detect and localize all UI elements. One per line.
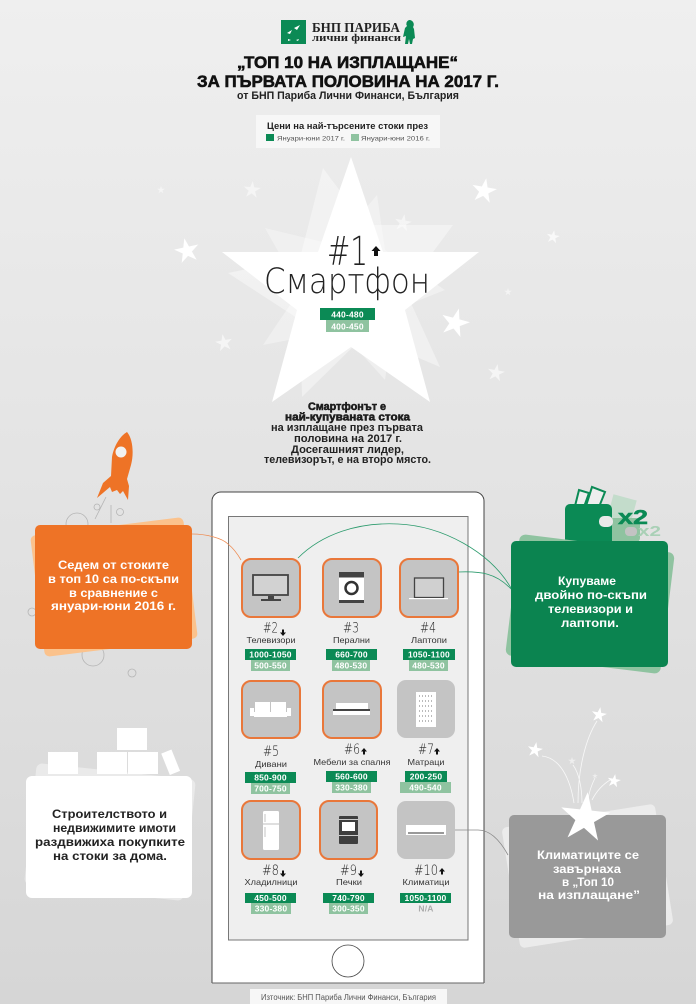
item: #3 washing machines [323,559,381,671]
item: #9 stoves: Печки [336,877,362,887]
card: green: x2 [638,523,661,540]
title: „ТОП 10 НА ИЗПЛАЩАНЕ“ [237,53,458,72]
item: #2 televisions: 1000-1050 [249,650,292,660]
source note: Източник: БНП Париба Лични Финанси, България [261,993,436,1002]
title: от БНП Париба Лични Финанси, България [237,90,459,102]
logo: лични финанси [312,33,401,44]
card: white: раздвижиха покупките [35,835,185,849]
item: #10 air conditioners [397,801,455,914]
icon: mattress [416,692,436,727]
card: grey with stars: в „Топ 10 [562,877,614,889]
item: #5 sofas: Дивани [255,759,287,769]
text block: smartphone: Досегашният лидер, [291,444,404,456]
item: #3 washing machines: 660-700 [335,650,368,660]
item: #10 air conditioners: #10 [414,863,438,879]
item: #7 mattresses: Матраци [408,757,445,767]
icon: tv [253,575,288,601]
price bars: smartphone: 400-450 [331,322,364,332]
item: #9 stoves: 740-790 [332,893,365,903]
title [197,53,499,102]
item: #2 televisions: Телевизори [246,635,296,645]
card: grey with stars [501,706,674,948]
card: grey with stars: Климатиците се [537,850,639,862]
price bars: smartphone [320,308,375,332]
item: #4 laptops: Лаптопи [411,635,447,645]
item: #2 televisions: #2 [263,620,278,636]
item: #6 bedroom furniture: 330-380 [335,782,368,792]
card: grey with stars: на изплащане” [538,890,640,902]
text block: smartphone: половина на 2017 г. [294,433,402,445]
card: green: x2 [618,507,648,529]
logo [281,20,415,44]
card: green: Купуваме [558,574,616,588]
text block: smartphone: Смартфонът е [308,401,386,413]
legend: Януари-юни 2017 г. [277,136,345,142]
card: white: Строителството и [52,807,167,821]
icon: stove [339,816,358,844]
item: #7 mattresses: 490-540 [409,782,442,792]
card: orange [30,517,198,657]
phone [0,492,696,1004]
text block: smartphone: на изплащане през първата [271,422,424,434]
item: #5 sofas: #5 [263,744,279,760]
legend [256,115,440,148]
item: #3 washing machines: #3 [343,620,359,636]
card: orange: в сравнение с [69,586,158,600]
icon: air conditioner [406,825,446,835]
card: green: лаптопи. [561,616,619,630]
card: grey with stars: завърнаха [553,864,622,876]
card: orange: в топ 10 са по-скъпи [48,572,179,586]
card: orange: януари-юни 2016 г. [51,599,176,613]
item: #8 refrigerators: Хладилници [244,877,298,887]
text block: smartphone: телевизорът, е на второ място. [264,454,431,466]
item: #9 stoves: 300-350 [332,904,365,914]
card: white [24,728,196,901]
item: #6 bedroom furniture [314,681,391,793]
item: #8 refrigerators: 450-500 [254,893,287,903]
item: #4 laptops: 1050-1100 [408,650,450,660]
item: #3 washing machines: 480-530 [335,660,367,670]
icon: bed [333,703,370,715]
icon: sofa [250,702,291,717]
text block: smartphone: най-купуваната стока [285,412,411,424]
item: #8 refrigerators: 330-380 [255,904,287,914]
icon: washing machine [339,572,364,603]
item: #9 stoves [320,801,377,914]
item: #4 laptops: 480-530 [412,660,445,670]
item: #6 bedroom furniture: Мебели за спалня [314,757,391,767]
item: #5 sofas: 700-750 [254,784,287,794]
title: ЗА ПЪРВАТА ПОЛОВИНА НА 2017 Г. [197,72,499,91]
item: #7 mattresses [397,680,455,793]
icon: fridge [263,811,279,850]
item: #10 air conditioners: 1050-1100 [405,893,447,903]
card: green: телевизори и [548,602,633,616]
item: #8 refrigerators: #8 [262,863,279,879]
heading: #1 smartphone: #1 [327,229,368,275]
connector lines [192,524,511,855]
item: #9 stoves: #9 [340,863,357,879]
item: #7 mattresses: #7 [418,742,434,758]
item: #4 laptops: #4 [420,620,436,636]
item: #8 refrigerators [242,801,300,914]
card: white: на стоки за дома. [53,849,167,863]
heading: #1 smartphone [264,229,430,302]
big star [222,157,479,402]
source note [250,989,447,1004]
card: orange: Седем от стоките [58,558,169,572]
item: #2 televisions: 500-550 [254,660,287,670]
price bars: smartphone: 440-480 [331,310,364,320]
icon: rocket [28,432,136,677]
item: #2 televisions [242,559,300,671]
card: green [505,487,675,674]
item: #10 air conditioners: Климатици [402,877,450,887]
card: green: двойно по-скъпи [535,588,647,602]
item: #10 air conditioners: N/A [418,904,434,914]
item: #3 washing machines: Перални [333,635,370,645]
item: #6 bedroom furniture: 560-600 [335,772,368,782]
icon: laptop [409,578,448,599]
small background stars [157,176,561,382]
legend: Цени на най-търсените стоки през [267,121,428,132]
item: #6 bedroom furniture: #6 [344,742,360,758]
item: #5 sofas: 850-900 [254,772,287,782]
heading: #1 smartphone: Смартфон [264,262,430,302]
card: white: недвижимите имоти [53,821,176,835]
item: #4 laptops [400,559,458,671]
item: #7 mattresses: 200-250 [410,772,442,782]
logo: БНП ПАРИБА [312,20,400,35]
text block: smartphone [264,401,431,466]
legend: Януари-юни 2016 г. [361,136,430,142]
item: #5 sofas [242,681,300,794]
